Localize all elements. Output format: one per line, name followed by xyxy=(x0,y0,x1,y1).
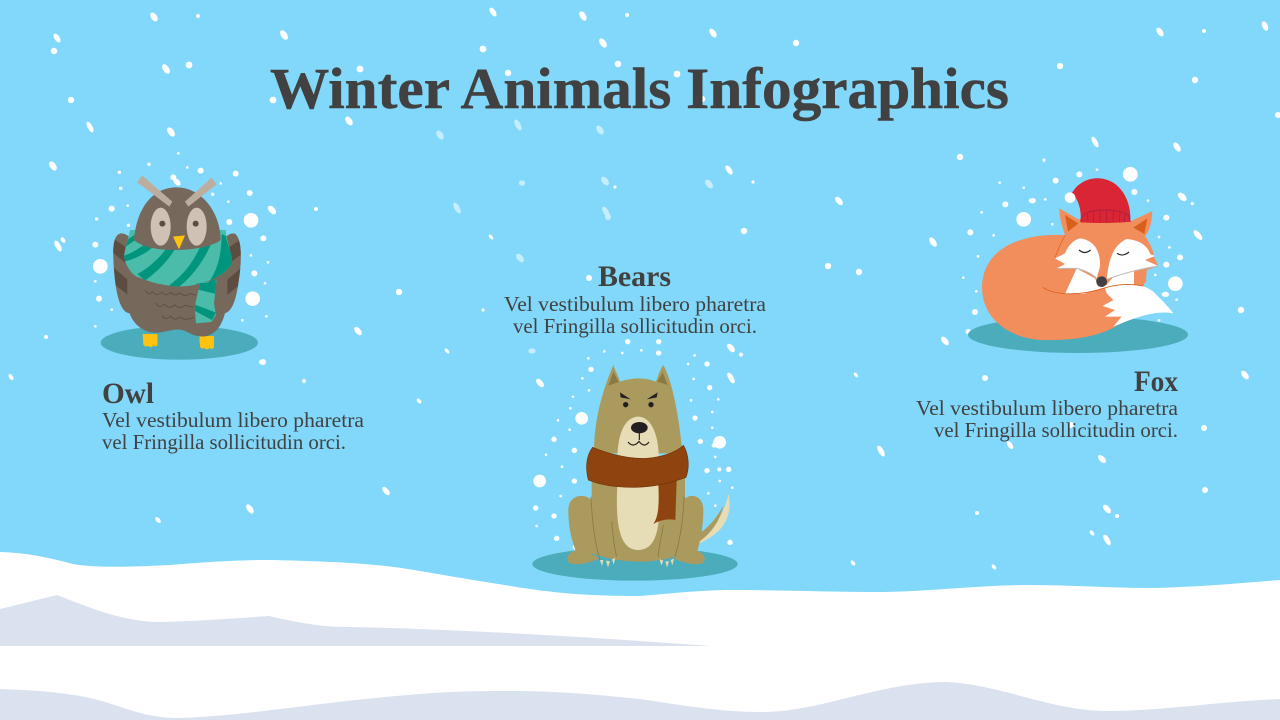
fox illustration xyxy=(962,160,1202,353)
bears description: Vel vestibulum libero pharetra xyxy=(504,292,766,316)
panel: fox xyxy=(916,160,1202,442)
bear illustration xyxy=(532,339,743,581)
owl description: Vel vestibulum libero pharetra xyxy=(102,408,364,432)
panel: bears xyxy=(504,260,766,581)
bears description: vel Fringilla sollicitudin orci. xyxy=(513,314,757,338)
fox heading: Fox xyxy=(1134,365,1178,398)
back snow hills xyxy=(0,595,711,646)
panel: owl xyxy=(92,152,364,454)
front snow hills xyxy=(0,682,1280,720)
fox description: vel Fringilla sollicitudin orci. xyxy=(934,418,1178,442)
title: Winter Animals Infographics xyxy=(270,56,1009,121)
falling snow background xyxy=(7,6,1280,570)
owl description: vel Fringilla sollicitudin orci. xyxy=(102,430,346,454)
snow ground xyxy=(0,552,1280,720)
bears heading: Bears xyxy=(598,260,671,293)
owl heading: Owl xyxy=(102,377,154,410)
fox description: Vel vestibulum libero pharetra xyxy=(916,396,1178,420)
owl illustration xyxy=(92,152,278,365)
